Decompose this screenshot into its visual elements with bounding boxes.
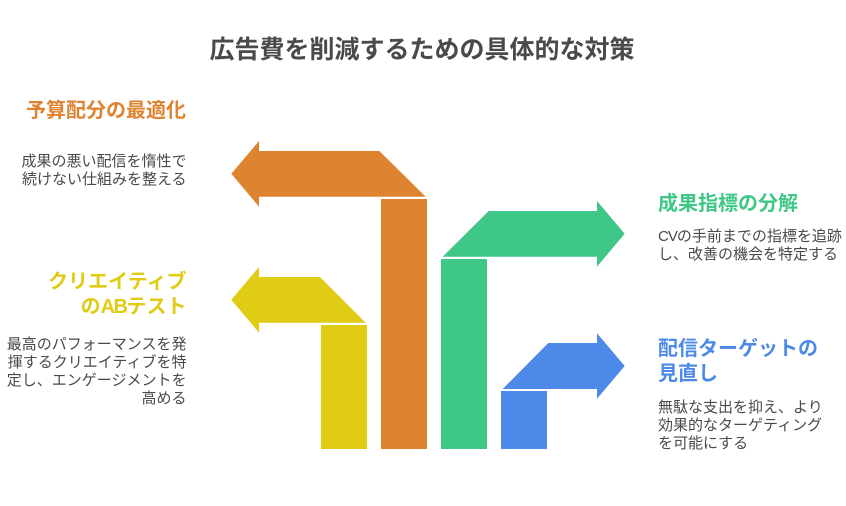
arrow: yellow, creative AB test [231,267,367,449]
text: delivery targeting: 効果的なターゲティング [658,417,822,434]
arrow: blue, delivery targeting [501,333,625,449]
title: 広告費を削減するための具体的な対策 [209,36,634,64]
text: metric breakdown: し、改善の機会を特定する [658,246,838,263]
text: delivery targeting: を可能にする [658,435,748,452]
heading: budget allocation: 予算配分の最適化 [26,100,186,122]
heading: metric breakdown: 成果指標の分解 [658,193,798,215]
text: creative AB test: 揮するクリエイティブを特 [8,354,186,371]
heading: creative AB test: のABテスト [81,296,186,318]
heading: creative AB test: クリエイティブ [48,271,186,293]
arrow: orange, budget allocation [231,141,427,449]
text: creative AB test: 定し、エンゲージメントを [7,372,186,389]
text: creative AB test [7,336,186,407]
heading: delivery targeting: 見直し [658,362,718,384]
text: metric breakdown [658,228,842,263]
heading: delivery targeting [658,338,818,384]
text: delivery targeting: 無駄な支出を抑え、より [658,399,823,416]
heading: creative AB test [48,270,186,318]
text: delivery targeting [658,399,823,452]
text: creative AB test: 高める [141,390,186,407]
text: metric breakdown: CVの手前までの指標を追跡 [658,228,842,245]
arrow: green, metric breakdown [441,201,625,449]
text: budget allocation: 成果の悪い配信を惰性で [21,153,186,170]
heading: delivery targeting: 配信ターゲットの [658,338,818,360]
text: budget allocation [21,153,186,188]
text: budget allocation: 続けない仕組みを整える [22,171,186,188]
text: creative AB test: 最高のパフォーマンスを発 [7,336,186,353]
